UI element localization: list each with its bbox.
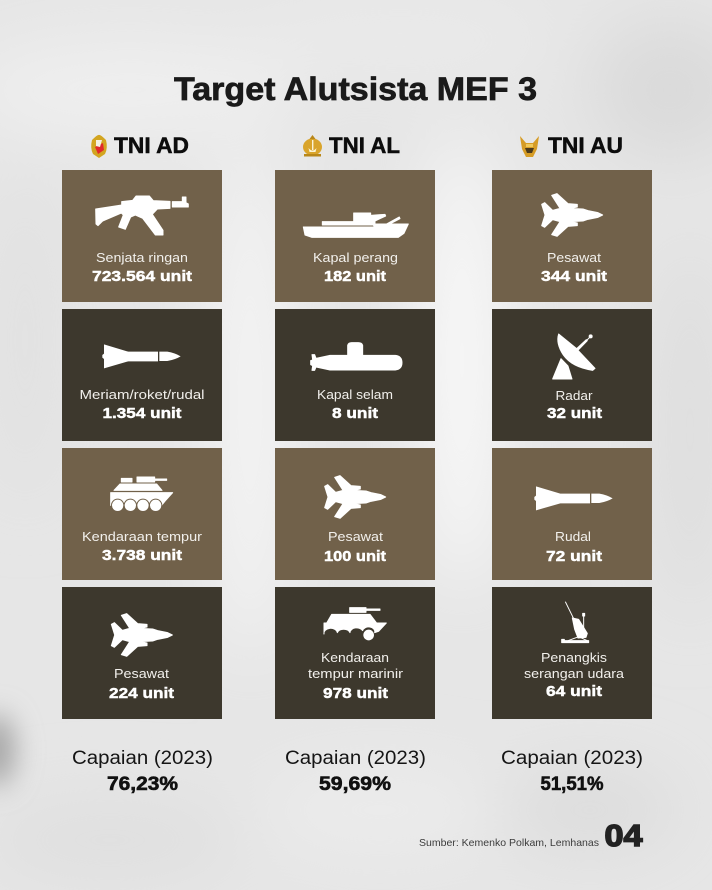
icon: fighter jet — [111, 614, 172, 656]
achievement: TNI AL — [285, 748, 426, 795]
panel: Pesawat (AU): 344 unit — [541, 268, 607, 285]
source note: Sumber: Kemenko Polkam, Lemhanas — [419, 837, 599, 849]
page number: 04 — [604, 818, 643, 853]
achievement: TNI AD — [72, 748, 213, 795]
icon: radar dish — [553, 334, 595, 379]
achievement: TNI AU — [501, 748, 643, 795]
achievement: TNI AL: Capaian (2023) — [285, 748, 426, 769]
panel: Pesawat (AU): Pesawat — [547, 250, 601, 265]
icon: assault rifle — [96, 196, 188, 235]
panel: Pesawat (AU) — [492, 170, 652, 302]
icon: armoured vehicle — [111, 477, 173, 512]
panel: Radar: 32 unit — [547, 405, 602, 422]
panel: Kendaraan tempur — [62, 448, 222, 580]
panel: Senjata ringan — [62, 170, 222, 302]
panel: Kendaraan tempur marinir: Kendaraan — [321, 650, 389, 665]
column header: TNI AD: TNI AD — [114, 133, 189, 158]
panel: Meriam/roket/rudal: 1.354 unit — [102, 405, 182, 422]
icon: fighter jet — [325, 476, 386, 518]
panel: Pesawat (AD): 224 unit — [109, 685, 174, 702]
panel: Rudal: 72 unit — [546, 548, 602, 565]
panel: Kapal perang — [275, 170, 435, 302]
panel: Pesawat (AD): Pesawat — [114, 666, 169, 681]
panel: Senjata ringan: 723.564 unit — [92, 268, 192, 285]
panel: Penangkis serangan udara: Penangkis — [541, 650, 608, 665]
icon: missile — [534, 486, 613, 510]
panel: Kendaraan tempur marinir: 978 unit — [323, 685, 388, 702]
achievement: TNI AU: Capaian (2023) — [501, 748, 643, 769]
panel: Meriam/roket/rudal: Meriam/roket/rudal — [80, 387, 205, 402]
panel: Kapal perang: Kapal perang — [313, 250, 398, 265]
achievement: TNI AU: 51,51% — [540, 774, 604, 795]
panel: Kendaraan tempur marinir: tempur marinir — [308, 666, 404, 681]
column header: TNI AL: TNI AL — [329, 133, 400, 158]
icon: TNI AD emblem — [91, 135, 107, 158]
panel: Kapal selam — [275, 309, 435, 441]
panel: Kapal selam: 8 unit — [332, 405, 378, 422]
panel: Radar — [492, 309, 652, 441]
panel: Senjata ringan: Senjata ringan — [96, 250, 188, 265]
icon: missile — [102, 344, 181, 368]
achievement: TNI AD: Capaian (2023) — [72, 748, 213, 769]
panel: Kendaraan tempur marinir — [275, 587, 435, 719]
icon: warship — [303, 213, 408, 237]
achievement: TNI AD: 76,23% — [107, 774, 178, 795]
panel: Kapal perang: 182 unit — [324, 268, 386, 285]
panel: Rudal — [492, 448, 652, 580]
icon: TNI AU emblem — [520, 136, 539, 157]
achievement: TNI AL: 59,69% — [319, 774, 391, 795]
panel: Pesawat (AL): 100 unit — [324, 548, 386, 565]
panel: Pesawat (AD) — [62, 587, 222, 719]
icon: fighter jet — [542, 194, 603, 236]
icon: TNI AL emblem — [303, 135, 322, 156]
panel: Kendaraan tempur: 3.738 unit — [102, 547, 182, 564]
panel: Penangkis serangan udara: serangan udara — [524, 666, 625, 681]
icon: submarine — [311, 343, 402, 370]
panel: Meriam/roket/rudal — [62, 309, 222, 441]
panel: Kendaraan tempur: Kendaraan tempur — [82, 529, 203, 544]
panel: Rudal: Rudal — [555, 529, 591, 544]
panel: Pesawat (AL): Pesawat — [328, 529, 383, 544]
panel: Penangkis serangan udara — [492, 587, 652, 719]
panel: Kapal selam: Kapal selam — [317, 387, 393, 402]
icon: anti-aircraft gun — [562, 602, 589, 643]
column header: TNI AU: TNI AU — [548, 133, 623, 158]
panel: Pesawat (AL) — [275, 448, 435, 580]
panel: Radar: Radar — [556, 388, 593, 403]
title: Target Alutsista MEF 3 — [174, 71, 537, 107]
panel: Penangkis serangan udara: 64 unit — [546, 683, 602, 700]
icon: amphibious vehicle — [324, 608, 386, 640]
